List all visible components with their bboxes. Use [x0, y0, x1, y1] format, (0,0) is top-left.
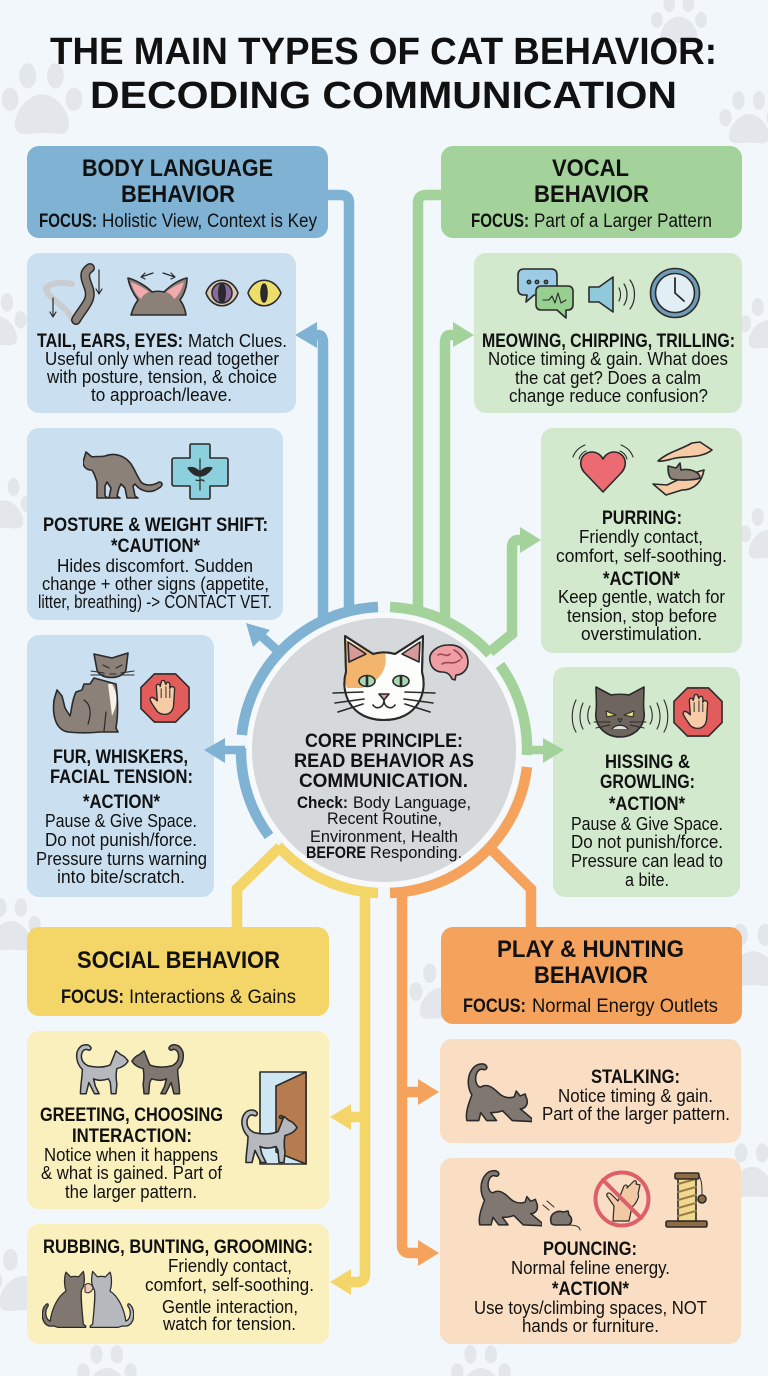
text: fur, whiskers, facial tension: FACIAL TENSION:	[50, 766, 193, 788]
panel: meowing, chirping, trilling	[474, 253, 742, 413]
icon: calico cat face	[333, 636, 435, 720]
text: pouncing: Normal feline energy.	[511, 1257, 670, 1278]
text: pouncing: Use toys/climbing spaces, NOT	[474, 1297, 707, 1318]
text: meowing, chirping, trilling	[482, 330, 735, 406]
icon: stop sign hand	[674, 688, 722, 736]
title: THE MAIN TYPES OF CAT BEHAVIOR:	[50, 31, 717, 73]
text: posture and weight shift: litter, breathing) -> CONTACT VET.	[38, 591, 272, 612]
text: purring: comfort, self-soothing.	[556, 545, 727, 566]
panel: body language header: Holistic View, Context is Key	[102, 211, 317, 232]
text: tail, ears, eyes: to approach/leave.	[91, 384, 232, 405]
connector arrows: social (yellow)	[237, 846, 378, 1295]
text: posture and weight shift	[38, 514, 272, 612]
panel: posture and weight shift	[27, 428, 283, 620]
text: fur, whiskers, facial tension: into bite/scratch.	[57, 866, 185, 887]
text: rubbing, bunting, grooming: watch for tension.	[162, 1313, 296, 1334]
text: posture and weight shift: Hides discomfort. Sudden	[57, 555, 253, 576]
icon: speech bubbles	[518, 269, 573, 318]
panel: purring	[541, 428, 742, 653]
icon: speaker	[589, 277, 634, 312]
text: purring: Keep gentle, watch for	[558, 586, 725, 607]
text: rubbing, bunting, grooming	[43, 1236, 314, 1334]
text: posture and weight shift: change + other signs (appetite,	[42, 573, 269, 594]
text: fur, whiskers, facial tension: FUR, WHISKERS,	[53, 746, 188, 768]
text: hissing and growling: HISSING &	[605, 751, 690, 773]
text: meowing, chirping, trilling: Notice timing & gain. What does	[488, 348, 728, 369]
text: core principle: COMMUNICATION.	[299, 770, 468, 792]
panel: social header: Interactions & Gains	[129, 987, 296, 1008]
text: hissing and growling: Pressure can lead to	[571, 850, 723, 871]
panel: hissing and growling	[553, 667, 740, 897]
text: fur, whiskers, facial tension: *ACTION*	[83, 791, 160, 813]
text: tail, ears, eyes: Useful only when read together	[45, 348, 279, 369]
text: stalking: STALKING:	[591, 1066, 680, 1088]
text: pouncing: hands or furniture.	[522, 1315, 659, 1336]
panel: vocal header: Part of a Larger Pattern	[534, 211, 712, 232]
text: core principle: Body Language,	[353, 793, 471, 812]
text: hissing and growling: a bite.	[625, 869, 669, 890]
text: meowing, chirping, trilling: change reduce confusion?	[509, 385, 708, 406]
panel: vocal header	[441, 146, 742, 238]
panel: social header: SOCIAL BEHAVIOR	[77, 947, 280, 974]
connector arrows: play and hunting (orange)	[390, 767, 531, 1266]
panel: body language header: BODY LANGUAGE	[82, 155, 273, 182]
icon: door and cat	[242, 1072, 306, 1164]
text: core principle	[294, 730, 474, 862]
text: purring: PURRING:	[602, 507, 682, 529]
text: stalking: Notice timing & gain.	[558, 1085, 713, 1106]
text: core principle: Environment, Health	[310, 827, 458, 846]
icon: clock	[650, 268, 700, 318]
icon: hands holding cat	[653, 442, 712, 495]
text: rubbing, bunting, grooming: Friendly contact,	[168, 1255, 292, 1276]
connector arrows: vocal (green)	[390, 195, 553, 755]
text: tail, ears, eyes: Match Clues.	[188, 330, 287, 351]
text: fur, whiskers, facial tension: Pressure turns warning	[36, 848, 207, 869]
text: tail, ears, eyes: TAIL, EARS, EYES:	[37, 330, 183, 352]
text: hissing and growling: Do not punish/force.	[571, 831, 723, 852]
text: greeting, choosing interaction: INTERACTION:	[72, 1125, 192, 1147]
text: pouncing: POUNCING:	[543, 1238, 637, 1260]
text: core principle: Recent Routine,	[327, 809, 442, 828]
icon: cats rubbing	[42, 1271, 134, 1327]
text: core principle: CORE PRINCIPLE:	[305, 730, 463, 752]
panel: rubbing, bunting, grooming	[27, 1224, 329, 1344]
panel: play and hunting header: Normal Energy Outlets	[532, 996, 718, 1017]
panel: body language header	[27, 146, 328, 238]
text: core principle: BEFORE	[306, 843, 366, 862]
icon: no hands sign	[596, 1172, 648, 1226]
text: posture and weight shift: POSTURE & WEIGHT SHIFT:	[43, 514, 268, 536]
panel: vocal header: BEHAVIOR	[534, 181, 649, 208]
title: DECODING COMMUNICATION	[90, 75, 677, 117]
text: hissing and growling: GROWLING:	[600, 771, 695, 793]
text: greeting, choosing interaction: & what is gained. Part of	[41, 1162, 223, 1183]
icon: stalking cat	[466, 1064, 532, 1122]
panel: social header	[27, 927, 329, 1016]
icon: stop sign hand	[141, 674, 189, 722]
panel: play and hunting header: FOCUS:	[463, 996, 526, 1017]
panel: tail, ears, eyes	[27, 253, 296, 413]
text: hissing and growling: Pause & Give Space.	[571, 813, 723, 834]
panel: play and hunting header: BEHAVIOR	[534, 962, 648, 989]
icon: tense cat	[54, 653, 134, 733]
text: purring: tension, stop before	[567, 605, 717, 626]
arrowhead: to fur, whiskers, facial tension	[204, 738, 225, 763]
text: fur, whiskers, facial tension: Pause & Give Space.	[45, 810, 197, 831]
panel: core principle	[247, 613, 521, 887]
text: hissing and growling: *ACTION*	[609, 793, 685, 815]
panel: body language header: FOCUS:	[39, 211, 97, 232]
text: stalking: Part of the larger pattern.	[542, 1103, 730, 1124]
text: greeting, choosing interaction	[40, 1104, 223, 1202]
arrowhead: to hissing and growling	[543, 738, 564, 763]
panel: social header: FOCUS:	[61, 987, 124, 1008]
text: fur, whiskers, facial tension	[36, 746, 207, 887]
text: core principle: Check:	[297, 793, 348, 812]
icon: ears	[128, 273, 187, 315]
icon: medical cross	[172, 444, 228, 499]
text: pouncing: *ACTION*	[552, 1278, 629, 1300]
icon: hunched cat	[83, 452, 162, 498]
text: purring: *ACTION*	[603, 568, 680, 590]
panel: vocal header: VOCAL	[552, 155, 629, 182]
icon: hissing cat	[572, 687, 668, 737]
text: stalking	[542, 1066, 730, 1124]
panel: pouncing	[440, 1158, 741, 1344]
connector arrows: body language (blue)	[214, 195, 378, 836]
panel: vocal header: FOCUS:	[471, 211, 529, 232]
text: hissing and growling	[571, 751, 723, 890]
panel: body language header: BEHAVIOR	[121, 181, 235, 208]
text: core principle: READ BEHAVIOR AS	[294, 750, 474, 772]
panel: greeting, choosing interaction	[27, 1031, 329, 1209]
icon: pouncing cat and mouse	[479, 1171, 580, 1230]
text: purring: Friendly contact,	[579, 526, 703, 547]
panel: stalking	[440, 1039, 741, 1143]
panel: play and hunting header: PLAY & HUNTING	[497, 936, 684, 963]
icon: brain	[430, 645, 468, 680]
text: tail, ears, eyes	[37, 330, 287, 405]
text: greeting, choosing interaction: the larger pattern.	[65, 1181, 197, 1202]
icon: purring heart	[573, 445, 633, 492]
text: core principle: Responding.	[370, 843, 462, 862]
icon: tail	[46, 268, 102, 320]
title	[50, 31, 717, 117]
icon: scratching post	[666, 1173, 707, 1227]
text: posture and weight shift: *CAUTION*	[111, 535, 200, 557]
text: fur, whiskers, facial tension: Do not punish/force.	[45, 829, 197, 850]
text: pouncing	[474, 1238, 707, 1336]
text: rubbing, bunting, grooming: RUBBING, BUNTING, GROOMING:	[43, 1236, 313, 1258]
text: tail, ears, eyes: with posture, tension, & choice	[46, 366, 277, 387]
text: rubbing, bunting, grooming: Gentle interaction,	[162, 1296, 298, 1317]
text: greeting, choosing interaction: Notice when it happens	[44, 1144, 218, 1165]
icon: greeting cats	[77, 1045, 183, 1094]
text: purring: overstimulation.	[581, 623, 702, 644]
text: greeting, choosing interaction: GREETING, CHOOSING	[40, 1104, 223, 1126]
text: meowing, chirping, trilling: the cat get? Does a calm	[515, 367, 701, 388]
text: rubbing, bunting, grooming: comfort, self-soothing.	[145, 1274, 314, 1295]
icon: eyes	[206, 280, 281, 306]
panel: fur, whiskers, facial tension	[27, 635, 214, 897]
panel: play and hunting header	[441, 927, 742, 1024]
text: purring	[556, 507, 727, 644]
